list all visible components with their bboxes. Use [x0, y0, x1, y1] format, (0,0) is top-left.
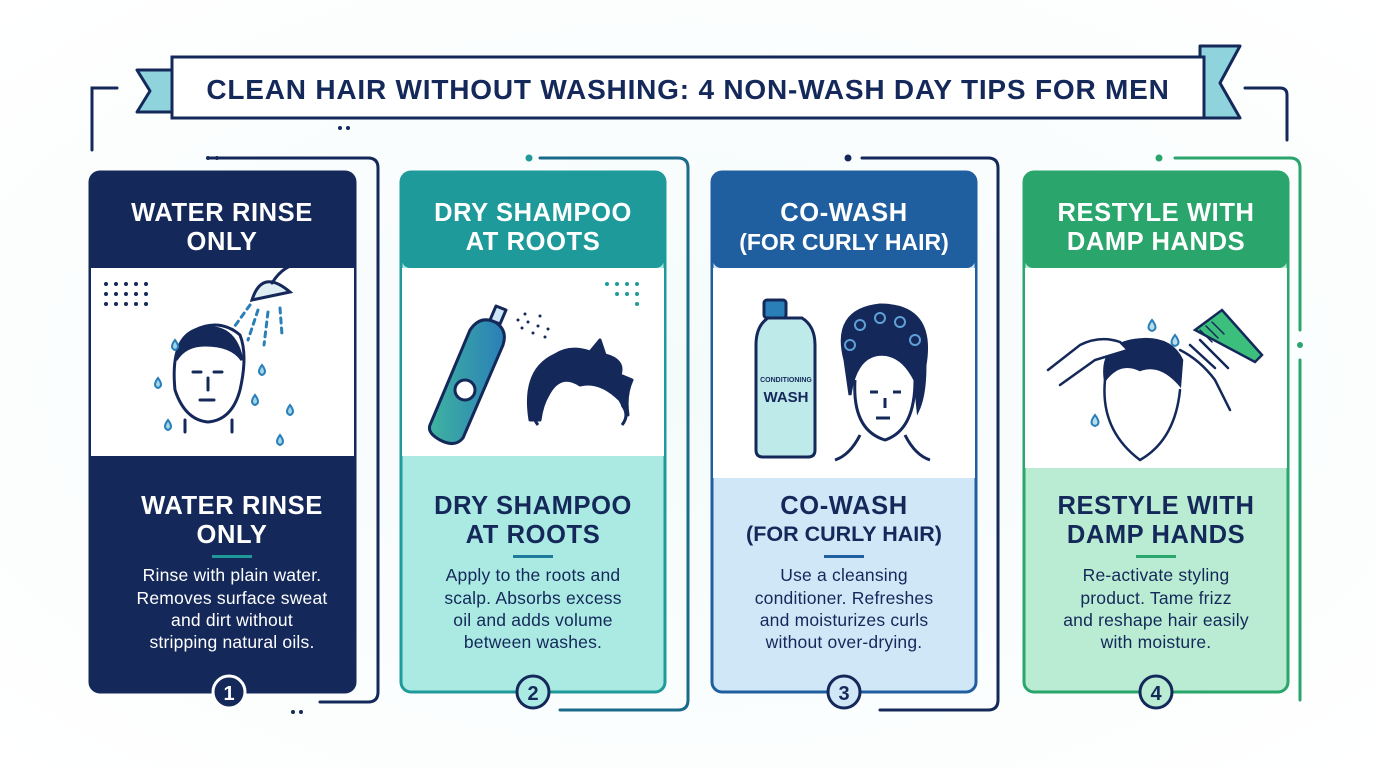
card 3 body: conditioner. Refreshes: [755, 588, 933, 608]
card 2 header: DRY SHAMPOO: [434, 199, 632, 227]
card 4 body: RESTYLE WITH: [1057, 492, 1255, 520]
number badge 3: [828, 676, 860, 708]
card 2 body: [434, 492, 632, 652]
card 1 body: Removes surface sweat: [137, 588, 327, 608]
number badge 2: [517, 676, 549, 708]
card 1 body: and dirt without: [171, 610, 293, 630]
card 4 body: DAMP HANDS: [1067, 521, 1245, 549]
decorative frame lines: [92, 88, 1300, 710]
card 2 body: between washes.: [464, 632, 602, 652]
card 1 body: WATER RINSE: [141, 492, 323, 520]
card 1 header: [131, 199, 313, 256]
card 3 header: [713, 173, 975, 268]
card 3 body: Use a cleansing: [780, 565, 908, 585]
icon: spray can and hair: [429, 282, 639, 444]
number badge 3: 3: [838, 683, 850, 705]
card 3 body: [746, 492, 942, 652]
card 2 body: scalp. Absorbs excess: [444, 588, 622, 608]
card 2 body: Apply to the roots and: [446, 565, 620, 585]
icon: bottle and curly hair: CONDITIONING: [760, 377, 812, 384]
card 1 body: Rinse with plain water.: [143, 565, 321, 585]
card 4 body: [1057, 492, 1255, 652]
card 4 body: Re-activate styling: [1083, 565, 1229, 585]
card 2 body: DRY SHAMPOO: [434, 492, 632, 520]
number badge 4: 4: [1150, 683, 1162, 705]
card 4: restyle: [1024, 172, 1288, 708]
number badge 2: 2: [527, 683, 539, 705]
card 1 body: stripping natural oils.: [149, 632, 315, 652]
icon: bottle and curly hair: WASH: [764, 389, 808, 406]
card 4 body: and reshape hair easily: [1063, 610, 1249, 630]
card 1: water rinse: [90, 172, 355, 708]
icon: hands styling hair with comb: [1048, 310, 1262, 460]
card 3 body: (FOR CURLY HAIR): [746, 522, 942, 546]
card 4 header: RESTYLE WITH: [1057, 199, 1255, 227]
card 1 body: ONLY: [197, 521, 267, 549]
card 4 header: DAMP HANDS: [1067, 228, 1245, 256]
card 3 header: CO-WASH: [780, 199, 908, 227]
number badge 1: [213, 676, 245, 708]
card 4 header: [1025, 173, 1287, 268]
card 2: dry shampoo: [401, 172, 665, 708]
card 2 body: oil and adds volume: [453, 610, 613, 630]
card 1 header: WATER RINSE: [131, 199, 313, 227]
number badge 4: [1140, 676, 1172, 708]
card 3 body: without over-drying.: [765, 632, 922, 652]
card 3 body: and moisturizes curls: [760, 610, 928, 630]
card 2 body: AT ROOTS: [466, 521, 600, 549]
card 4 body: with moisture.: [1100, 632, 1211, 652]
card 2 header: AT ROOTS: [466, 228, 600, 256]
icon: face under shower: [104, 264, 320, 445]
card 1 header: ONLY: [187, 228, 257, 256]
card 3 body: CO-WASH: [780, 492, 908, 520]
card 3: co-wash: [712, 172, 976, 708]
number badge 1: 1: [223, 683, 235, 705]
card 2 header: [402, 173, 664, 268]
icon: bottle and curly hair: [756, 300, 930, 460]
title banner: [137, 46, 1240, 118]
card 4 body: product. Tame frizz: [1080, 588, 1232, 608]
card 3 header: (FOR CURLY HAIR): [739, 229, 949, 255]
title banner: CLEAN HAIR WITHOUT WASHING: 4 NON-WASH DAY TIPS FOR MEN: [206, 74, 1170, 105]
card 1 body: [137, 492, 327, 652]
